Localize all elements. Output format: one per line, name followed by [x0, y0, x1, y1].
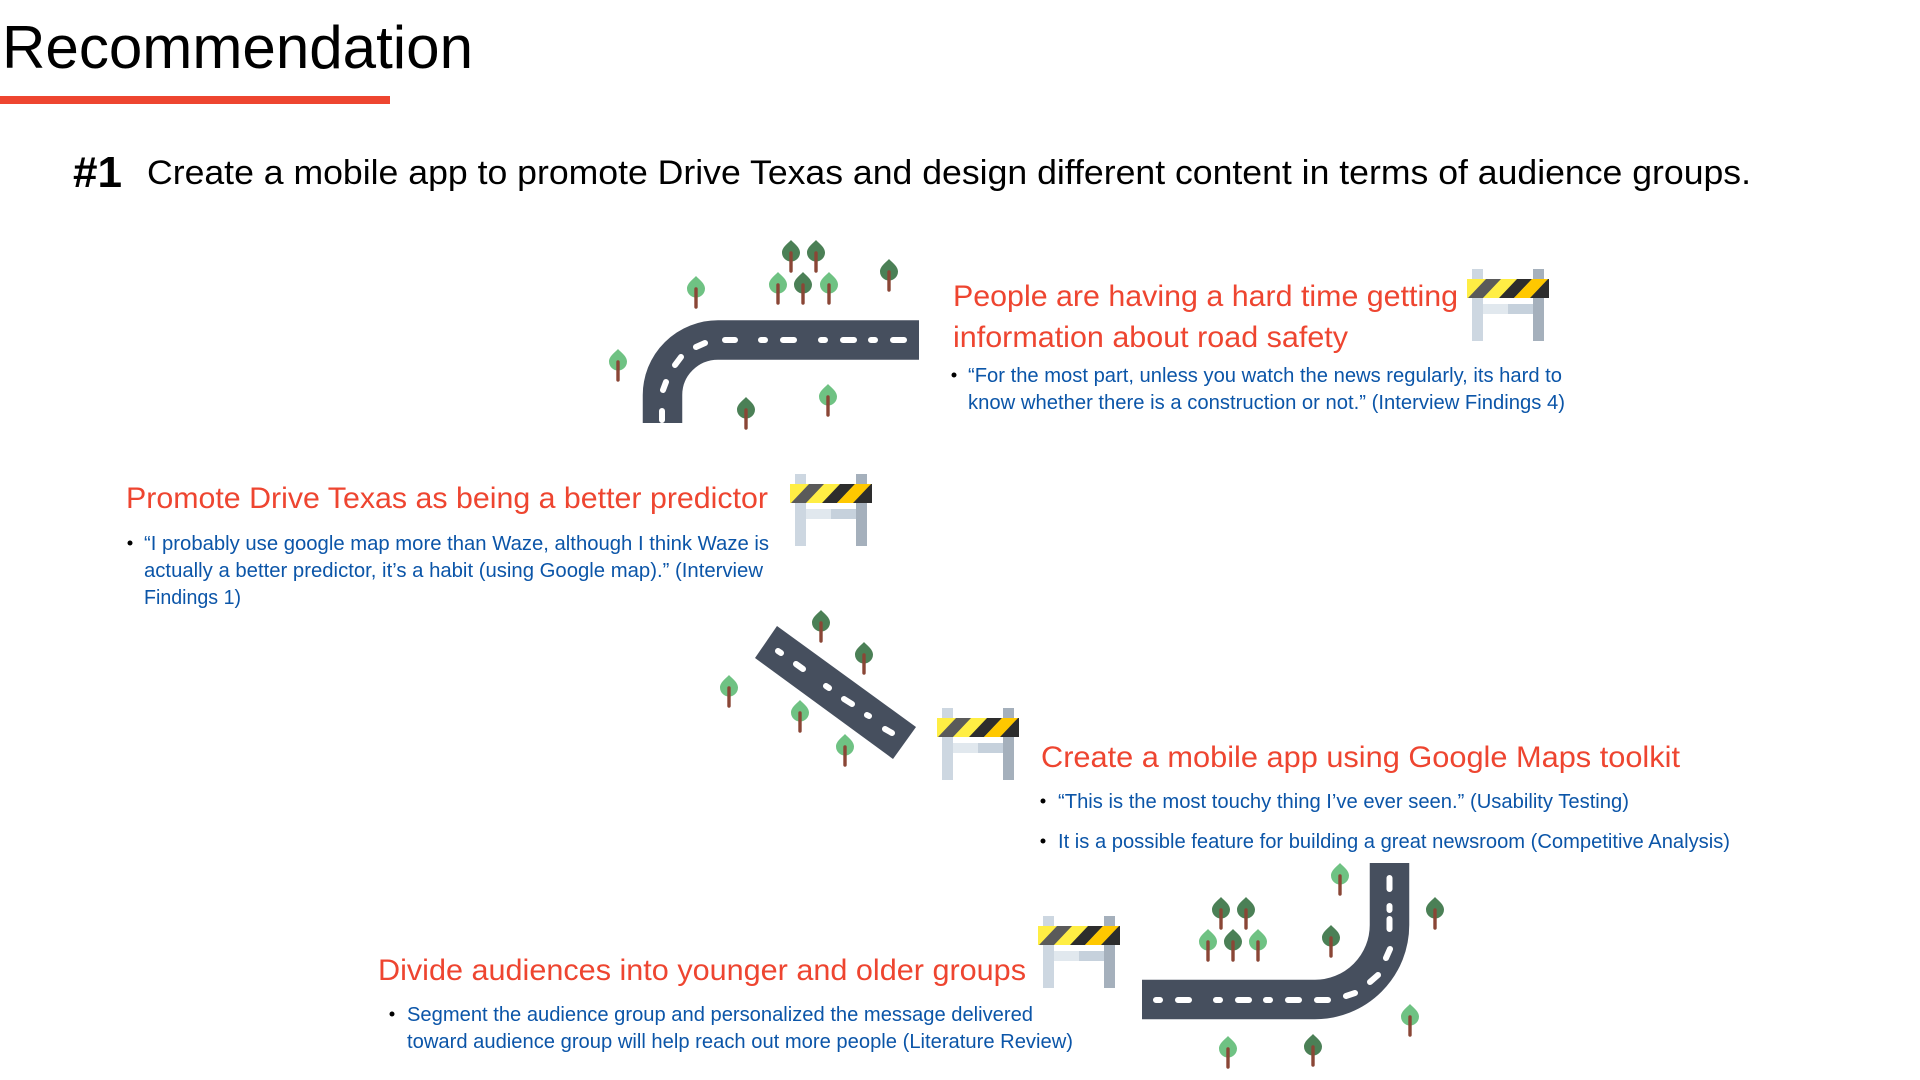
heading: road safety [953, 280, 1458, 354]
icon: road barrier [937, 708, 1019, 780]
trees around diagonal road [720, 610, 873, 765]
bullet: literature review: Segment the audience group and personalized the message delivered [407, 1004, 1033, 1026]
title underline [0, 96, 390, 104]
quote: interview findings 4: “For the most part, unless you watch the news regularly, its hard to [968, 365, 1562, 387]
icon: curved road with dashes [662, 340, 919, 423]
bullet: literature review [390, 1004, 1073, 1053]
quote: interview findings 1: “I probably use google map more than Waze, although I think Waze is [144, 533, 769, 555]
quote: interview findings 1 [128, 533, 769, 609]
heading: audience groups: Divide audiences into younger and older groups [378, 954, 1026, 987]
panel: google maps toolkit [720, 610, 1730, 853]
quote: interview findings 1: actually a better predictor, it’s a habit (using Google map).” (Interview [144, 560, 764, 582]
quote: interview findings 1: Findings 1) [144, 587, 241, 609]
heading: road safety: information about road safety [953, 321, 1348, 354]
heading: better predictor: Promote Drive Texas as being a better predictor [126, 482, 768, 515]
recommendation statement: Create a mobile app to promote Drive Texas and design different content in terms of audience groups. [147, 154, 1751, 192]
panel: road safety information [609, 240, 1565, 428]
quote: interview findings 4 [952, 365, 1565, 414]
bullet: literature review: toward audience group will help reach out more people (Literature Review) [407, 1031, 1073, 1053]
icon: road barrier [1038, 916, 1120, 988]
heading: road safety: People are having a hard time getting [953, 280, 1458, 313]
recommendation number: #1 [73, 148, 122, 197]
trees around road [1199, 863, 1444, 1067]
bullet: competitive analysis: It is a possible feature for building a great newsroom (Competitive Analysis) [1058, 831, 1730, 853]
heading: google maps toolkit: Create a mobile app using Google Maps toolkit [1041, 741, 1680, 774]
title: Recommendation [2, 14, 473, 81]
panel: audience groups [378, 863, 1444, 1067]
bullet: usability testing: “This is the most touchy thing I’ve ever seen.” (Usability Testing) [1058, 791, 1629, 813]
icon: diagonal road with dashes [755, 626, 916, 759]
icon: curved road with dashes [1142, 863, 1390, 1000]
icon: road barrier [790, 474, 872, 546]
quote: interview findings 4: know whether there is a construction or not.” (Interview Findings 4) [968, 392, 1565, 414]
icon: road barrier [1467, 269, 1549, 341]
trees around road [609, 240, 898, 428]
panel: better predictor [126, 474, 872, 609]
